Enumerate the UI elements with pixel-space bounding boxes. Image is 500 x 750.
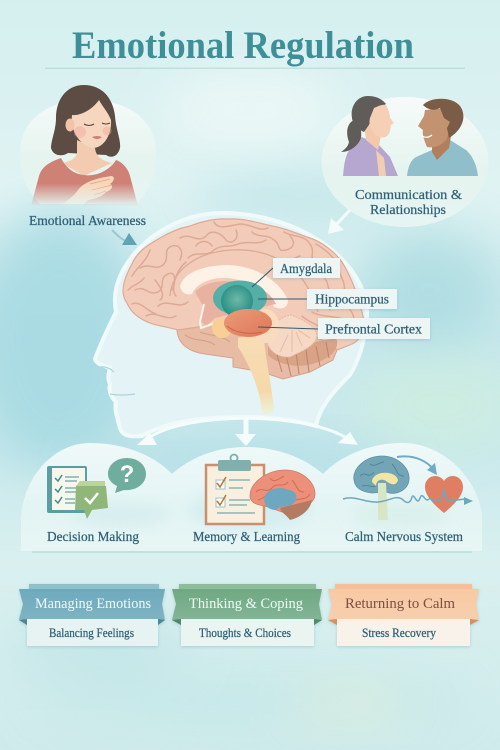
icon: decision checklist xyxy=(47,466,108,519)
panel: thinking and coping: Thoughts & Choices xyxy=(199,625,291,640)
icon: memory brain xyxy=(250,470,315,520)
icon: question speech bubble xyxy=(108,458,146,493)
illustration: woman with hand on chest xyxy=(31,85,138,206)
label: emotional awareness: Emotional Awareness xyxy=(29,213,146,228)
leader line: amygdala xyxy=(252,268,273,287)
label: communication and relationships: Communication & xyxy=(355,188,462,203)
ventricle xyxy=(195,281,276,326)
panel: managing emotions xyxy=(19,584,165,646)
icon: memory clipboard xyxy=(206,454,264,524)
panel: managing emotions: Managing Emotions xyxy=(35,596,151,612)
title divider xyxy=(45,68,465,69)
label: calm nervous system: Calm Nervous System xyxy=(345,530,463,545)
leader line: hippocampus xyxy=(258,298,307,300)
leader line: prefrontal cortex xyxy=(258,327,318,329)
title: Emotional Regulation xyxy=(72,24,414,67)
circle backdrop xyxy=(20,100,156,204)
brain diagram xyxy=(123,219,364,415)
side nuclei xyxy=(212,318,232,338)
brainstem xyxy=(238,336,274,415)
arrow: relationships to brain xyxy=(328,210,350,234)
arrows: brain to outcomes xyxy=(137,418,358,446)
arrow: awareness to brain xyxy=(112,230,137,245)
panel divider xyxy=(32,551,472,553)
hippocampus region xyxy=(213,280,267,316)
cerebellum arbor xyxy=(267,315,317,357)
label: communication and relationships: Relationships xyxy=(370,203,446,218)
label: decision making: Decision Making xyxy=(47,530,139,545)
panel: outcomes xyxy=(21,443,482,551)
callout: prefrontal cortex: Prefrontal Cortex xyxy=(325,322,422,336)
callout: hippocampus: Hippocampus xyxy=(315,292,389,306)
panel: returning to calm: Returning to Calm xyxy=(345,596,455,612)
prefrontal region xyxy=(224,309,272,337)
label: communication and relationships xyxy=(355,188,462,218)
temporal lobe folds xyxy=(185,332,230,345)
callout: hippocampus xyxy=(307,289,397,309)
panel: thinking and coping: Thinking & Coping xyxy=(189,596,303,612)
panel: emotional awareness xyxy=(20,85,156,206)
cingulate band xyxy=(170,250,318,312)
icon: heart xyxy=(425,476,463,513)
icon: calm brain xyxy=(354,456,409,520)
callout: prefrontal cortex xyxy=(318,318,430,339)
corpus callosum xyxy=(180,265,288,308)
nerve wave xyxy=(343,490,473,505)
icon: question speech bubble: ? xyxy=(120,461,134,488)
panel backdrop xyxy=(21,443,482,551)
panel: communication and relationships xyxy=(322,96,488,227)
panel: returning to calm xyxy=(328,584,479,646)
illustration: couple talking xyxy=(341,96,478,176)
face details xyxy=(100,367,135,395)
label: memory and learning: Memory & Learning xyxy=(193,530,300,545)
head silhouette xyxy=(95,213,367,436)
cortex folds xyxy=(128,222,354,336)
panel: thinking and coping xyxy=(172,584,322,646)
panel: managing emotions: Balancing Feelings xyxy=(49,625,134,640)
amygdala region xyxy=(221,285,253,317)
callout: amygdala: Amygdala xyxy=(280,261,332,276)
arrow: brain to heart xyxy=(397,456,437,475)
callout: amygdala xyxy=(273,258,340,278)
cerebral cortex xyxy=(123,219,364,350)
cerebellum striped xyxy=(268,338,337,376)
bubble backdrop xyxy=(322,97,488,227)
cerebellum and temporal base xyxy=(177,320,337,379)
panel: returning to calm: Stress Recovery xyxy=(362,625,436,640)
